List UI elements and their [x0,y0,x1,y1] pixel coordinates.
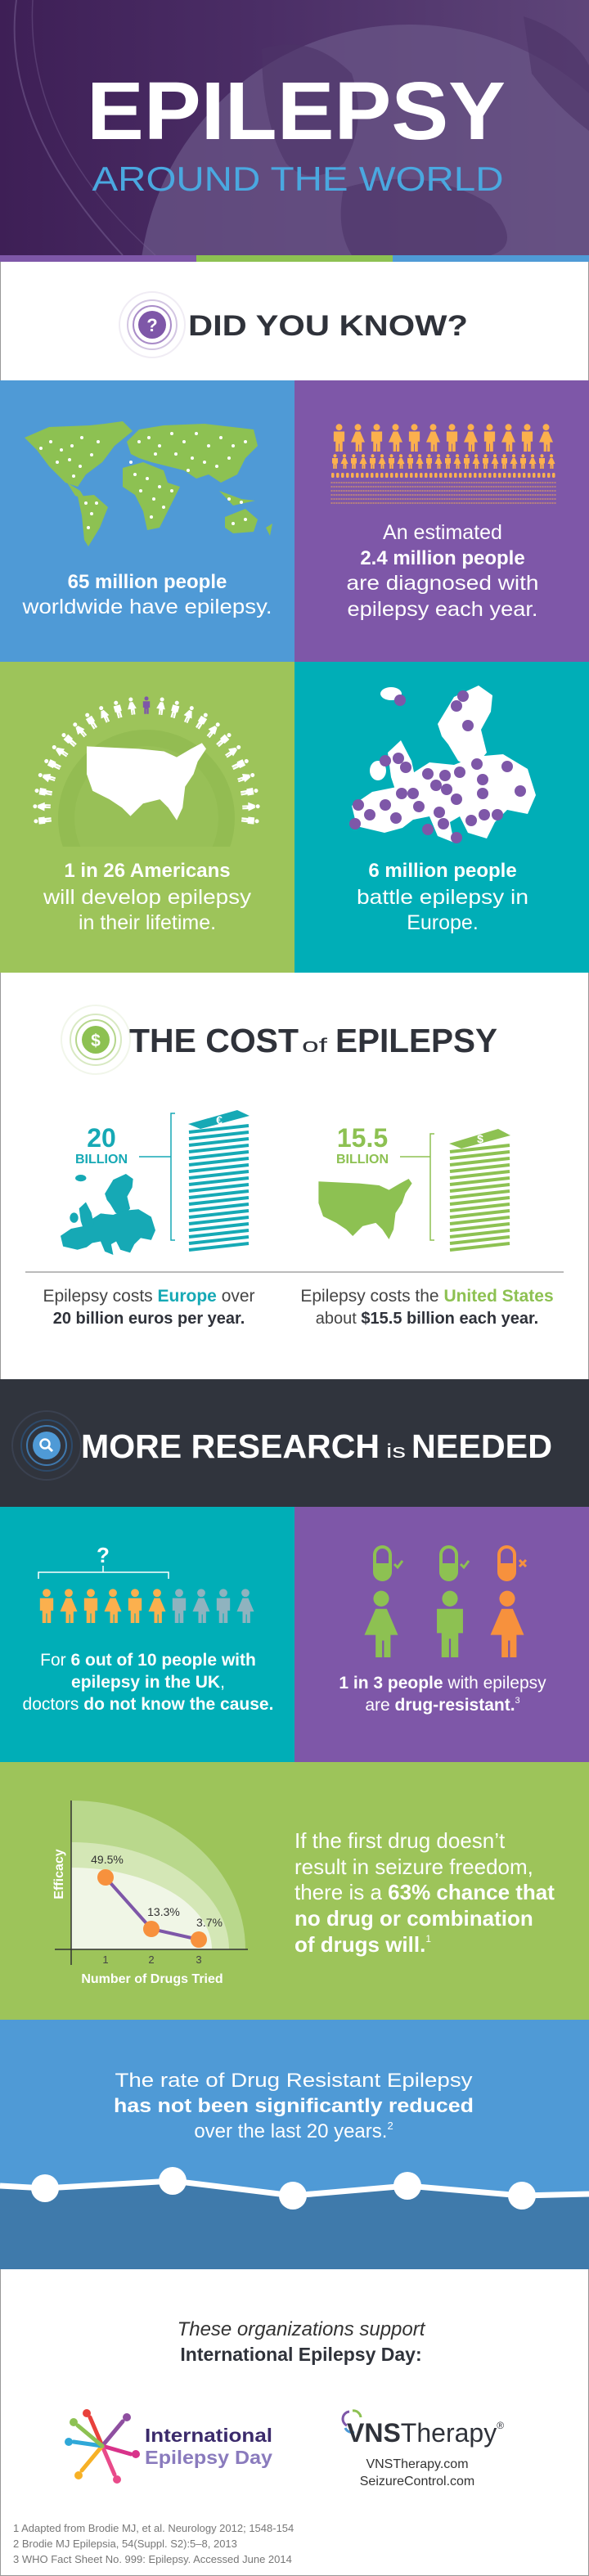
logo: VNS Therapy [343,2411,504,2488]
panel: 65 million worldwide: worldwide have epilepsy. [21,596,272,618]
supporters heading [178,2318,426,2365]
panel: unknown cause: epilepsy in the UK, [71,1673,225,1692]
panel: 6 million Europe: Europe. [407,911,479,934]
header banner [0,0,589,564]
supporters heading: International Epilepsy Day: [180,2344,422,2365]
cost: Europe: BILLION [75,1153,128,1167]
text: result in seizure freedom, [294,1854,533,1879]
chart: 2 [148,1953,155,1966]
cost: United States [318,1123,510,1250]
panel: 1 in 26 Americans: in their lifetime. [79,911,216,934]
cost captions: 20 billion euros per year. [53,1310,245,1328]
US map [87,743,206,820]
people [365,1591,398,1657]
cost captions: Epilepsy costs the United States [300,1287,554,1306]
chart [52,1801,248,1986]
logo: VNS Therapy: SeizureControl.com [360,2475,474,2488]
panel: 2.4 million diagnosed [294,380,589,662]
panel: unknown cause: For 6 out of 10 people with [40,1651,256,1670]
logo: International Epilepsy Day [65,2409,272,2484]
icons: pills [375,1547,526,1580]
panel: rate not reduced: over the last 20 years. [194,2120,387,2142]
chart: 13.3% [147,1905,180,1918]
cost: United States: 15.5 [337,1123,388,1153]
panel: drug-resistant [294,1507,589,1762]
panel: 1 in 26 Americans: 1 in 26 Americans [64,860,231,882]
panel: 6 million Europe: battle epilepsy in [357,886,528,909]
heading: more research needed: NEEDED [411,1427,552,1465]
supporters heading: These organizations support [178,2318,426,2340]
heading: cost of epilepsy: THE COST [129,1022,299,1059]
panel: unknown cause [0,1507,294,1762]
text: no drug or combination [294,1906,533,1931]
panel: unknown cause: ? [97,1543,110,1567]
chart: 49.5% [91,1853,124,1866]
cost captions [43,1287,554,1328]
panel: 2.4 million diagnosed: An estimated [383,521,502,544]
seizure markers [349,690,526,843]
panel: 6 million Europe [294,662,589,973]
cost captions: Epilepsy costs Europe over [43,1287,255,1306]
title: EPILEPSY [87,65,506,157]
panel: rate not reduced [0,2020,589,2269]
text: If the first drug doesn’t [294,1828,506,1853]
dollar stack [450,1145,510,1250]
icon: dollar [61,1005,130,1074]
Europe map [352,686,536,843]
people rows [330,424,556,504]
panel: 2.4 million diagnosed: are diagnosed with [347,572,538,595]
footnotes: 1 Adapted from Brodie MJ, et al. Neurology 2012; 1548-154 [13,2522,294,2534]
panel: 65 million worldwide [0,380,294,662]
cost: Europe [61,1110,250,1255]
cost: Europe: 20 [87,1123,116,1153]
text: there is a 63% chance that [294,1880,555,1904]
panel: efficacy chart [0,1762,589,2020]
panel: 1 in 26 Americans [0,662,294,973]
text [294,1828,555,1957]
euro stack [189,1126,249,1250]
heading: cost of epilepsy: EPILEPSY [335,1022,497,1059]
icon: dollar: $ [91,1032,101,1050]
chart: Number of Drugs Tried [81,1972,223,1986]
panel: rate not reduced: The rate of Drug Resistant Epilepsy [115,2070,473,2092]
people arc [33,696,260,825]
text: of drugs will. [294,1932,425,1957]
chart: 3 [196,1953,202,1966]
panel: drug-resistant: are drug-resistant. [365,1696,515,1715]
heading: cost of epilepsy [61,1005,497,1074]
footnotes: 3 WHO Fact Sheet No. 999: Epilepsy. Accessed June 2014 [13,2553,292,2565]
panel: unknown cause: doctors do not know the cause. [23,1695,273,1714]
logo: VNS Therapy: ® [497,2420,504,2431]
panel: 6 million Europe: 6 million people [368,860,517,882]
panel: drug-resistant: 1 in 3 people with epilepsy [339,1674,546,1693]
footnotes: 2 Brodie MJ Epilepsia, 54(Suppl. S2):5–8, 2013 [13,2538,237,2550]
panel: 2.4 million diagnosed: 2.4 million people [360,547,525,569]
logo: International Epilepsy Day: Epilepsy Day [145,2447,272,2468]
heading: did you know [119,292,468,357]
world map [25,421,272,546]
heading: more research needed: MORE RESEARCH [81,1427,380,1465]
icon: question: ? [146,315,158,335]
panel: drug-resistant: 3 [515,1696,520,1706]
panel: rate not reduced: has not been significantly reduced [114,2095,474,2117]
panel: rate not reduced: 2 [387,2120,393,2132]
chart: Efficacy [52,1849,66,1899]
heading: did you know: DID YOU KNOW? [188,310,468,342]
chart: 1 [102,1953,109,1966]
logo: VNS Therapy: VNSTherapy [347,2418,497,2448]
chart: 3.7% [196,1916,223,1929]
cost: United States: $ [477,1132,483,1145]
logo: VNS Therapy: VNSTherapy.com [366,2457,469,2471]
text: 1 [425,1933,431,1944]
panel: 1 in 26 Americans: will develop epilepsy [43,886,252,909]
heading: more research needed [0,1379,589,1507]
panel: 65 million worldwide: 65 million people [68,571,227,593]
icon: question [119,292,185,357]
heading: cost of epilepsy: of [302,1035,328,1057]
cost: Europe: € [216,1113,223,1126]
icon: magnifier [12,1411,81,1480]
subtitle: AROUND THE WORLD [92,160,504,198]
cost: United States: BILLION [336,1153,389,1167]
people row [40,1589,254,1623]
cost captions: about $15.5 billion each year. [316,1310,538,1328]
footnotes [13,2522,294,2565]
logo: International Epilepsy Day: International [145,2425,272,2446]
heading: more research needed: is [386,1441,406,1463]
panel: 2.4 million diagnosed: epilepsy each year. [347,598,538,621]
